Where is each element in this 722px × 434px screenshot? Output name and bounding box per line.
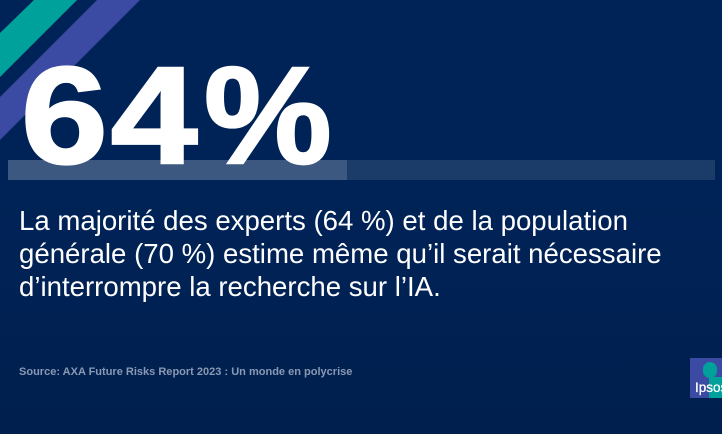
progress bar fill <box>8 160 347 180</box>
logo silhouette <box>703 362 717 378</box>
source: Source: AXA Future Risks Report 2023 : Un monde en polycrise <box>19 366 352 378</box>
progress bar <box>8 160 715 180</box>
description: d’interrompre la recherche sur l’IA. <box>19 271 441 302</box>
description: La majorité des experts (64 %) et de la population <box>19 205 628 236</box>
description <box>19 205 662 302</box>
diagonal stripes <box>0 0 140 140</box>
description: générale (70 %) estime même qu’il serait nécessaire <box>19 238 662 269</box>
logo: Ipsos <box>690 358 722 398</box>
logo teal panel <box>709 377 722 398</box>
big number <box>21 39 332 193</box>
big number: 64 <box>21 39 201 193</box>
big number: % <box>205 39 332 193</box>
